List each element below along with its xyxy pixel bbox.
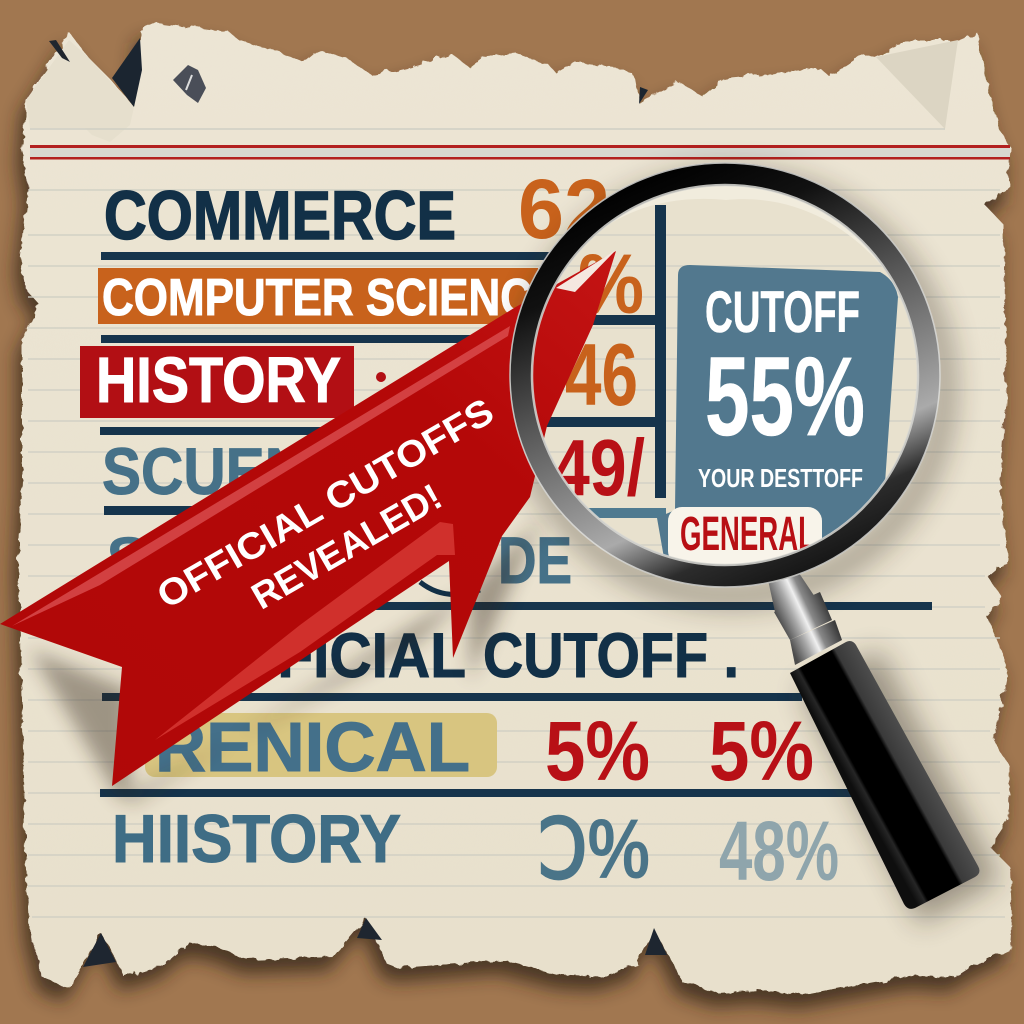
metal ring	[521, 174, 929, 576]
header rule lines	[30, 145, 1010, 160]
divider	[102, 693, 802, 701]
row: history: HIISTORY	[112, 801, 401, 877]
divider	[100, 602, 932, 610]
divider	[101, 252, 581, 260]
cutoff card: YOUR DESTTOFF	[698, 463, 863, 493]
row: history	[112, 801, 839, 898]
row: partially hidden	[106, 523, 572, 597]
torn hole: top middle	[639, 87, 648, 104]
row: commerce: 62	[518, 162, 610, 256]
row: general	[145, 704, 814, 798]
lens dividers	[546, 205, 666, 518]
lens numbers: 49/	[553, 423, 645, 512]
ruled paper lines	[28, 190, 1005, 917]
divider	[100, 427, 400, 435]
magnifier shadow	[520, 180, 1000, 925]
row: history: HISTORY	[96, 344, 341, 416]
torn scrap: grey diamond	[173, 65, 206, 103]
row: history: 48%	[719, 804, 839, 898]
ribbon top highlight	[12, 326, 510, 626]
row: computer science: COMPUTER SCIENC	[102, 269, 532, 327]
divider	[101, 335, 501, 343]
ribbon tip glare	[556, 250, 616, 292]
lens numbers	[558, 254, 644, 496]
torn hole: top left sliver	[49, 40, 70, 62]
ribbon text	[150, 390, 524, 658]
row: general: 5%	[709, 704, 814, 798]
cutoff card: CUTOFF	[705, 280, 860, 345]
cutoff card	[657, 265, 898, 575]
ribbon fold highlight	[155, 522, 455, 740]
divider	[100, 789, 852, 797]
row: general: RENICAL	[155, 708, 470, 786]
heading: official cutoff: OFFICIAL	[196, 621, 466, 691]
divider	[104, 506, 504, 515]
ribbon banner	[0, 250, 616, 786]
lens paper curl	[613, 186, 879, 262]
ribbon text: REVEALED!	[245, 476, 449, 617]
lens view	[544, 186, 916, 564]
row: history: Ↄ%	[538, 802, 650, 896]
row: commerce	[104, 162, 610, 256]
row: partially hidden: DE	[498, 523, 572, 597]
lens numbers: %	[578, 237, 644, 331]
ribbon shadow	[30, 520, 540, 805]
ring highlights	[510, 163, 940, 587]
torn hole: bottom left	[83, 933, 116, 967]
heading: official cutoff	[196, 621, 739, 691]
row: science: SCUEN	[102, 434, 307, 508]
row: partially hidden: S	[106, 523, 150, 597]
general tag: GENERAL	[680, 508, 815, 561]
row: commerce: COMMERCE	[104, 177, 456, 254]
handle neck	[768, 570, 842, 665]
torn hole: bottom right	[645, 928, 667, 955]
lens numbers: 46	[565, 325, 638, 424]
general tag	[668, 507, 822, 565]
ribbon text: OFFICIAL CUTOFFS	[150, 390, 500, 616]
row: general: 5%	[545, 704, 650, 798]
handle	[790, 641, 979, 909]
heading: official cutoff: CUTOFF .	[483, 621, 739, 691]
table rows	[80, 162, 932, 898]
cutoff card: 55%	[705, 334, 865, 459]
torn hole: dark gap	[112, 38, 142, 107]
torn hole: bottom middle	[357, 918, 382, 940]
magnifying glass	[510, 163, 979, 909]
